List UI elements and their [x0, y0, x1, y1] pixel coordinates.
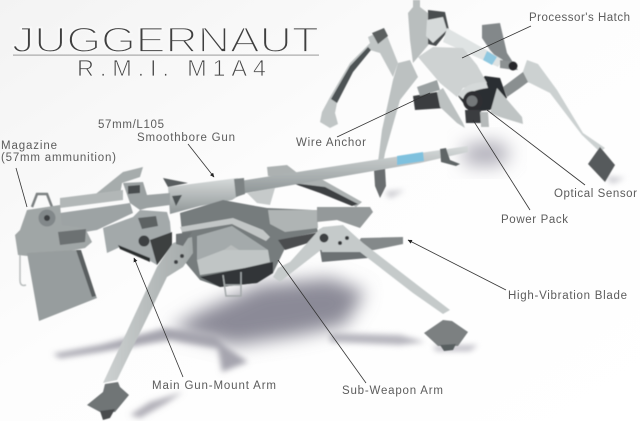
title: JUGGERNAUT: JUGGERNAUT	[12, 21, 319, 60]
title rule	[13, 55, 319, 56]
label: magazine: Magazine	[1, 140, 57, 152]
rear mech: front view	[320, 0, 615, 198]
label: high-vibration blade: High-Vibration Blade	[508, 290, 627, 302]
label: main gun-mount arm: Main Gun-Mount Arm	[152, 380, 276, 392]
magazine	[20, 250, 97, 321]
right front foot	[424, 320, 468, 351]
leader: optical sensor	[487, 110, 585, 185]
label: ammunition: (57mm ammunition)	[1, 152, 116, 164]
gun mount arm plate	[103, 210, 172, 265]
rear mech optical sensor	[458, 82, 489, 127]
cast shadows	[53, 140, 625, 418]
right front leg	[318, 225, 450, 314]
label: processor's hatch: Processor's Hatch	[529, 12, 630, 24]
leader: processor's hatch	[462, 26, 531, 58]
label: optical sensor: Optical Sensor	[554, 188, 637, 200]
rear mech spine	[408, 0, 449, 63]
arrow: high-vibration blade	[408, 240, 506, 290]
rear mech far left leg	[320, 28, 398, 128]
arrow: main gun-mount arm	[134, 258, 183, 377]
left front leg	[103, 232, 193, 383]
gun barrel	[163, 146, 468, 214]
label: sub-weapon arm: Sub-Weapon Arm	[342, 385, 443, 397]
high-vibration blade	[352, 237, 403, 252]
rear mech barrel	[443, 28, 518, 70]
subtitle: R.M.I. M1A4: R.M.I. M1A4	[77, 55, 266, 81]
receiver	[15, 182, 170, 257]
upper fin	[92, 167, 143, 198]
label: power pack: Power Pack	[501, 214, 568, 226]
rear mech central leg	[374, 60, 418, 198]
rear mech hull	[413, 47, 523, 128]
rear leg assembly	[247, 165, 362, 207]
hull	[180, 200, 373, 296]
label: smoothbore gun: Smoothbore Gun	[137, 132, 235, 144]
rear mech right leg	[503, 60, 615, 182]
leader: power pack	[473, 120, 530, 210]
label: gun calibre: 57mm/L105	[98, 119, 164, 131]
arrow: smoothbore gun	[188, 144, 214, 177]
leader: magazine	[16, 168, 27, 207]
label: wire anchor: Wire Anchor	[296, 137, 366, 149]
left front foot	[87, 382, 129, 420]
leader: wire anchor	[337, 93, 430, 137]
leader: sub-weapon arm	[278, 260, 366, 383]
main mech: side view	[15, 146, 468, 420]
sub-weapon arm	[273, 231, 328, 282]
rear mech rear leg behind barrel	[482, 23, 518, 70]
